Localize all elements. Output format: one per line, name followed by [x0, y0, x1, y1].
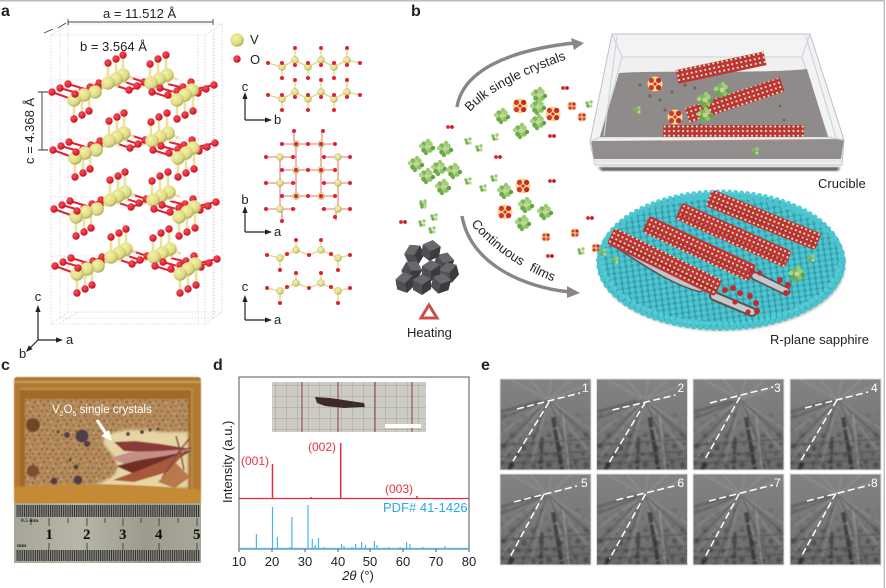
droplets: [616, 243, 786, 312]
peak labels: [241, 440, 413, 496]
ruler: 3: [119, 527, 126, 543]
axes main a b c: b: [19, 346, 26, 361]
tile 6: 6: [678, 476, 684, 490]
panel d: XRD chart: [213, 357, 476, 583]
inset photo with crystal: [272, 382, 426, 432]
label c: c: [1, 357, 10, 374]
x axis tick labels: 60: [396, 554, 410, 569]
x axis tick labels: 40: [331, 554, 345, 569]
label continuous films: Continuous films: [472, 220, 554, 281]
structure view b-a: [264, 129, 352, 223]
axes main a b c: a: [66, 332, 74, 347]
label b: b: [411, 3, 421, 20]
axes c-b: c: [242, 79, 249, 94]
heating triangle: [421, 305, 437, 318]
x axis tick labels: 30: [298, 554, 312, 569]
axes c-b: [242, 79, 281, 127]
ruler: [14, 503, 201, 563]
tile 4: [790, 379, 881, 470]
dimension b: b = 3.564 Å: [80, 39, 147, 54]
ruler: 5: [193, 527, 200, 543]
x axis tick labels: 20: [265, 554, 279, 569]
crystal rods on sapphire: [599, 189, 822, 315]
photo: [14, 377, 201, 504]
tile 3: 3: [774, 381, 781, 395]
legend V O: O: [250, 52, 260, 67]
tile 1: [500, 379, 591, 470]
label e: e: [481, 357, 490, 374]
x axis title: 2θ (°): [341, 568, 374, 583]
dimension c: [22, 92, 48, 164]
layered V2O5 structure: [48, 51, 221, 297]
axes main a b c: [19, 289, 74, 361]
axes main a b c: c: [35, 289, 42, 304]
axes c-a: a: [274, 312, 282, 327]
reference PDF pattern: [239, 505, 469, 549]
axes b-a: b: [241, 192, 249, 207]
label crystals: O: [64, 404, 73, 416]
x axis tick labels: 50: [363, 554, 377, 569]
arrow to crucible: [457, 38, 584, 107]
structure view c-a: [265, 238, 352, 305]
crystal rods in crucible: [633, 51, 804, 155]
tile 7: 7: [774, 476, 781, 490]
reference label: PDF# 41-1426: [383, 500, 468, 515]
molecular clusters: [399, 86, 615, 258]
arrow to crystals: [97, 420, 112, 441]
tile 7: [693, 474, 784, 565]
dimension a: a = 11.512 Å: [103, 6, 176, 21]
label crystals: 5: [73, 411, 77, 418]
tile 2: 2: [678, 381, 684, 395]
dimension b: [44, 23, 147, 54]
tile 6: [596, 474, 688, 565]
legend V O: V: [250, 32, 259, 47]
axes c-b: b: [274, 112, 281, 127]
panel a: crystal structure: [1, 3, 362, 361]
axes b-a: [241, 192, 282, 239]
label d: d: [213, 357, 223, 374]
sapphire substrate: [597, 189, 845, 331]
crucible label: Crucible: [818, 176, 866, 191]
axes b-a: a: [274, 224, 282, 239]
y axis title: Intensity (a.u.): [220, 421, 235, 503]
tile 2: [596, 379, 688, 470]
dimension c: c = 4.368 Å: [22, 98, 37, 164]
panel c: crystal photo: [1, 357, 201, 563]
tile 8: [790, 474, 881, 565]
label crystals: single crystals: [76, 404, 152, 416]
structure view c-b: [266, 46, 362, 112]
x axis tick labels: 70: [429, 554, 443, 569]
x axis tick labels: 80: [462, 554, 476, 569]
ruler: 0.5 mm: [21, 518, 39, 524]
ruler: mm: [17, 543, 27, 549]
axes c-a: [242, 279, 282, 327]
peak labels: (002): [308, 440, 336, 454]
sapphire label: R-plane sapphire: [770, 332, 869, 347]
label a: a: [1, 3, 10, 20]
crystals: [110, 436, 192, 488]
panel e: diffraction tiles: [481, 357, 881, 565]
ruler: 1: [46, 527, 53, 543]
legend V O: [230, 32, 260, 67]
tile 5: [500, 474, 591, 565]
peak labels: (003): [385, 482, 413, 496]
tile 8: 8: [871, 476, 878, 490]
label crystals: V: [52, 404, 60, 416]
x axis tick labels: 10: [232, 554, 246, 569]
peak labels: (001): [241, 454, 269, 468]
panel b: growth schematic: [396, 3, 869, 347]
measured XRD curve: [239, 443, 469, 498]
heating label: Heating: [407, 325, 452, 340]
tile 3: [693, 379, 784, 470]
tile 4: 4: [871, 381, 878, 395]
dark droplets: [26, 418, 160, 484]
crucible: [590, 34, 844, 171]
ruler: 4: [155, 527, 163, 543]
cubes source material: [394, 239, 461, 296]
label bulk single crystals: Bulk single crystals: [464, 53, 566, 112]
x axis tick labels: [232, 554, 476, 569]
plot frame and ticks: [239, 377, 469, 552]
tile 1: 1: [582, 381, 589, 395]
ruler: 2: [83, 527, 90, 543]
label crystals: 2: [60, 411, 64, 418]
axes c-a: c: [242, 279, 249, 294]
tile 5: 5: [581, 476, 588, 490]
dimension a: [68, 6, 213, 25]
arrow to sapphire: [462, 216, 580, 298]
dotted unit cells: [51, 24, 222, 324]
